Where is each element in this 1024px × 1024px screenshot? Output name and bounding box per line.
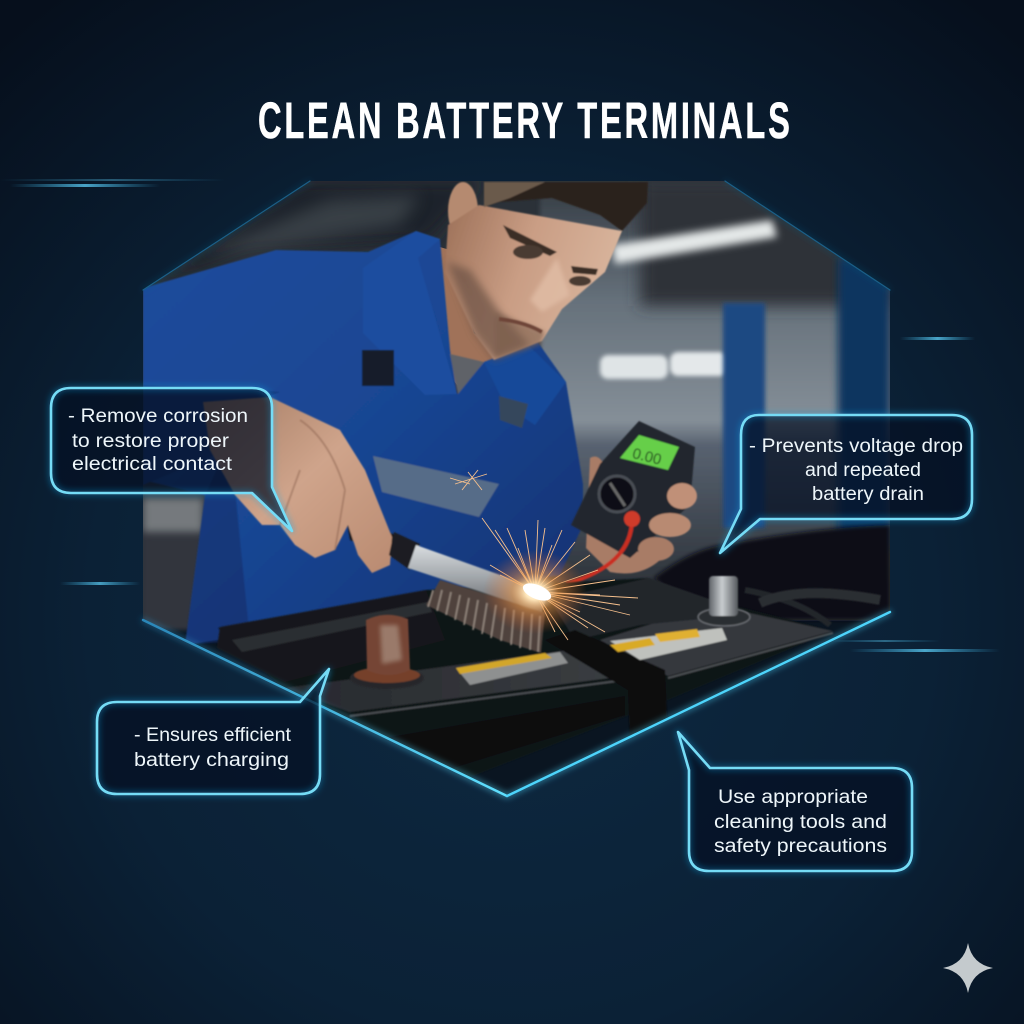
multimeter in hand <box>566 421 697 584</box>
battery <box>217 578 833 785</box>
callout: prevents voltage drop: and repeated <box>805 460 921 481</box>
warning labels <box>456 652 568 685</box>
callout: remove corrosion: to restore proper <box>72 431 230 452</box>
callout: tools and safety: Use appropriate <box>718 787 868 808</box>
callout: remove corrosion: - Remove corrosion <box>68 406 248 427</box>
hand <box>203 397 392 573</box>
ceiling lights <box>612 220 777 264</box>
workshop background <box>143 181 890 796</box>
holding strap <box>545 630 668 745</box>
nose and mouth <box>530 258 570 312</box>
car hood <box>654 525 890 620</box>
hair <box>484 182 648 231</box>
blue lift pillars <box>723 303 765 528</box>
callout: prevents voltage drop: battery drain <box>812 484 924 505</box>
photo: mechanic cleaning battery terminal <box>143 181 890 796</box>
hand with wire brush <box>203 397 548 653</box>
callout: efficient charging <box>97 669 329 794</box>
callout: efficient charging: battery charging <box>134 750 289 771</box>
callout: tools and safety <box>678 732 912 871</box>
callout: tools and safety: safety precautions <box>714 836 887 857</box>
dark lower left area <box>148 621 188 632</box>
callout: tools and safety: cleaning tools and <box>714 812 887 833</box>
title: CLEAN BATTERY TERMINALS <box>258 93 790 150</box>
callout: prevents voltage drop: - Prevents voltage drop <box>749 436 963 457</box>
callout: remove corrosion: electrical contact <box>72 454 233 475</box>
clean terminal <box>698 576 880 626</box>
sparks <box>450 470 638 640</box>
callout: efficient charging: - Ensures efficient <box>134 725 292 746</box>
light streaks <box>0 179 1000 652</box>
handle <box>346 525 394 542</box>
callout: prevents voltage drop <box>720 415 972 553</box>
brows and eyes <box>503 225 557 256</box>
metal body <box>408 545 548 612</box>
icon: sparkle watermark <box>943 943 993 993</box>
head and face <box>445 182 648 360</box>
brush ferrule <box>389 532 420 570</box>
neck <box>440 247 494 384</box>
multimeter in hand: 0.00 <box>631 445 663 469</box>
frame edges <box>143 181 890 796</box>
shirt details <box>363 231 457 395</box>
brush bristles <box>426 580 545 653</box>
callout: remove corrosion <box>51 388 292 531</box>
mechanic shirt <box>143 231 583 645</box>
corroded terminal <box>350 615 424 689</box>
